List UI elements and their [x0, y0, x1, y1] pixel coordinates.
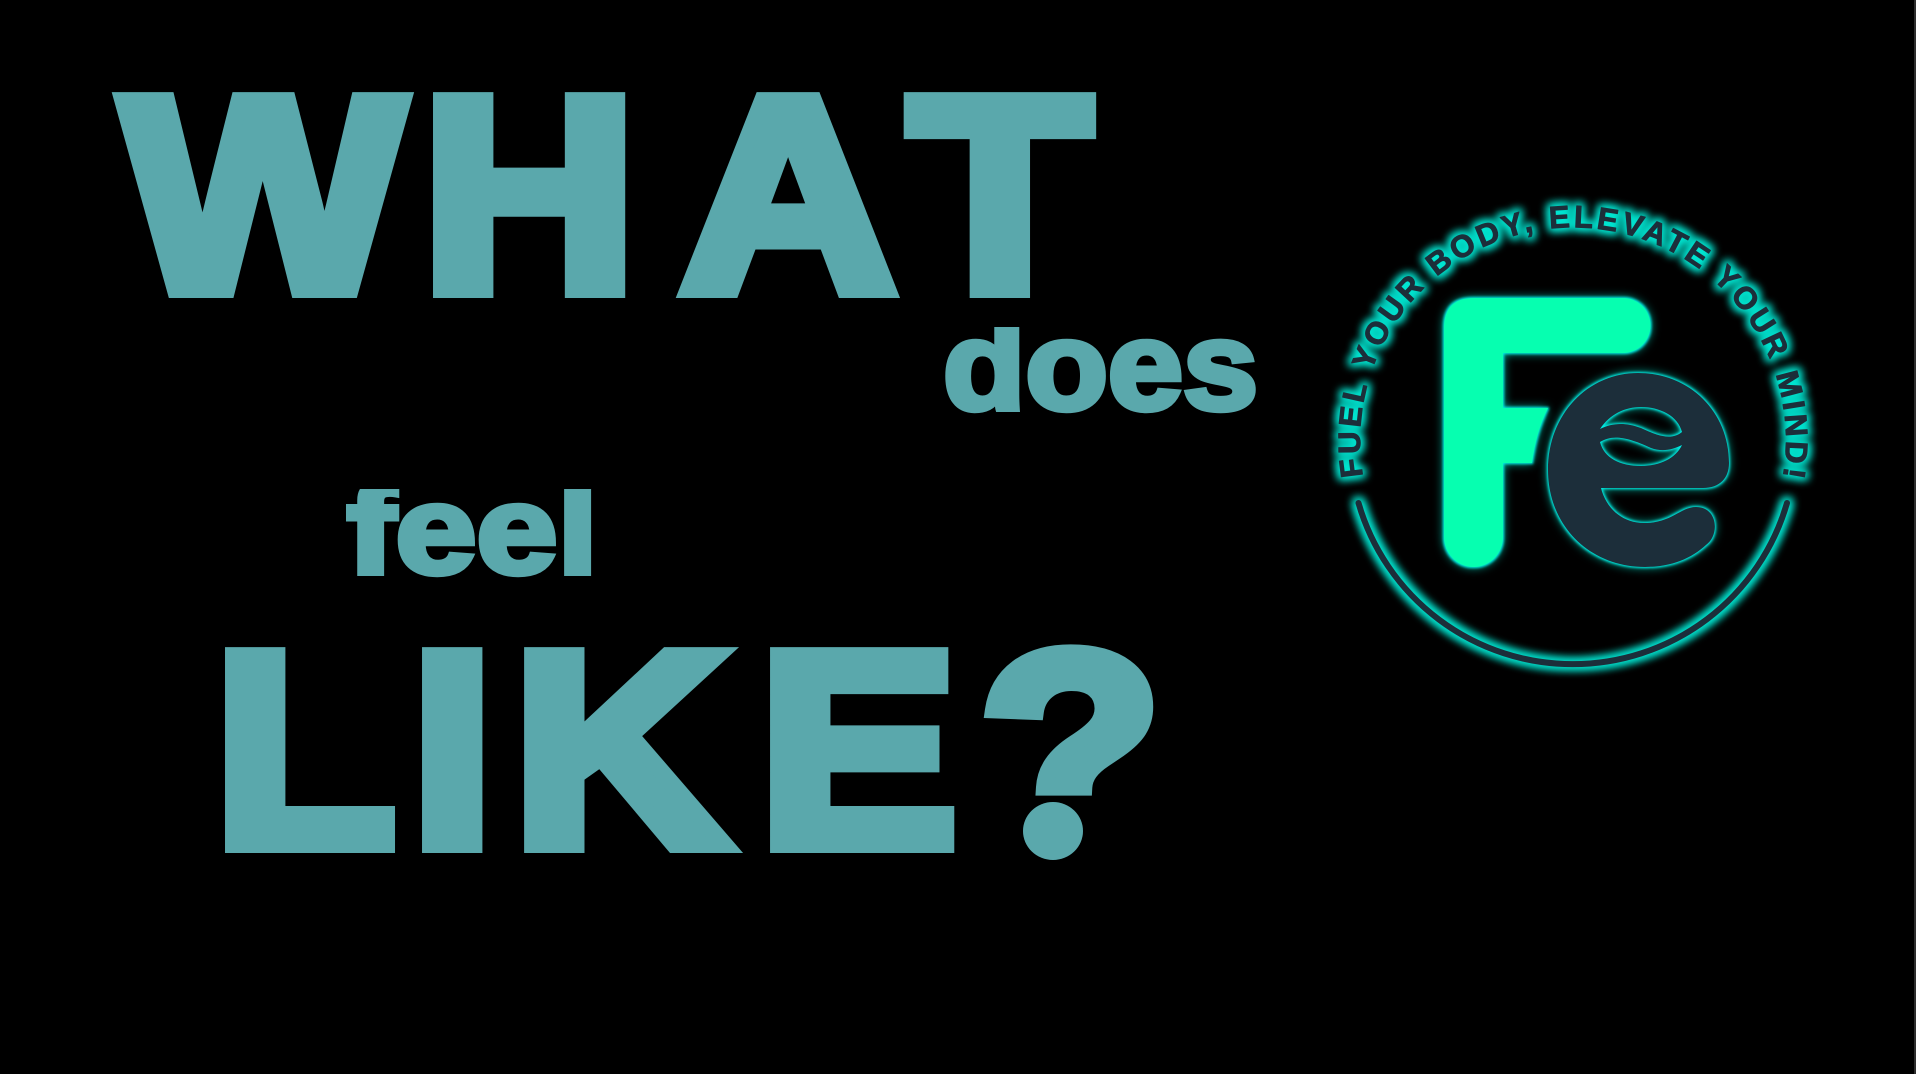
- logo lower arc: [1358, 503, 1787, 664]
- logo slogan on circular path: FUEL YOUR BODY, ELEVATE YOUR MIND!: [1328, 195, 1818, 488]
- heading word: does: does: [943, 296, 1258, 436]
- heading word: LIKE?: LIKE?: [214, 596, 1162, 903]
- heading word: WHAT: WHAT: [123, 41, 1091, 348]
- logo: Fe badge: [1328, 195, 1818, 678]
- heading word: feel: feel: [347, 460, 598, 600]
- heading: WHAT does feel LIKE?: [112, 92, 1256, 860]
- logo letter e with coffee bean counter: [1548, 373, 1729, 567]
- logo letter F: [1444, 298, 1650, 567]
